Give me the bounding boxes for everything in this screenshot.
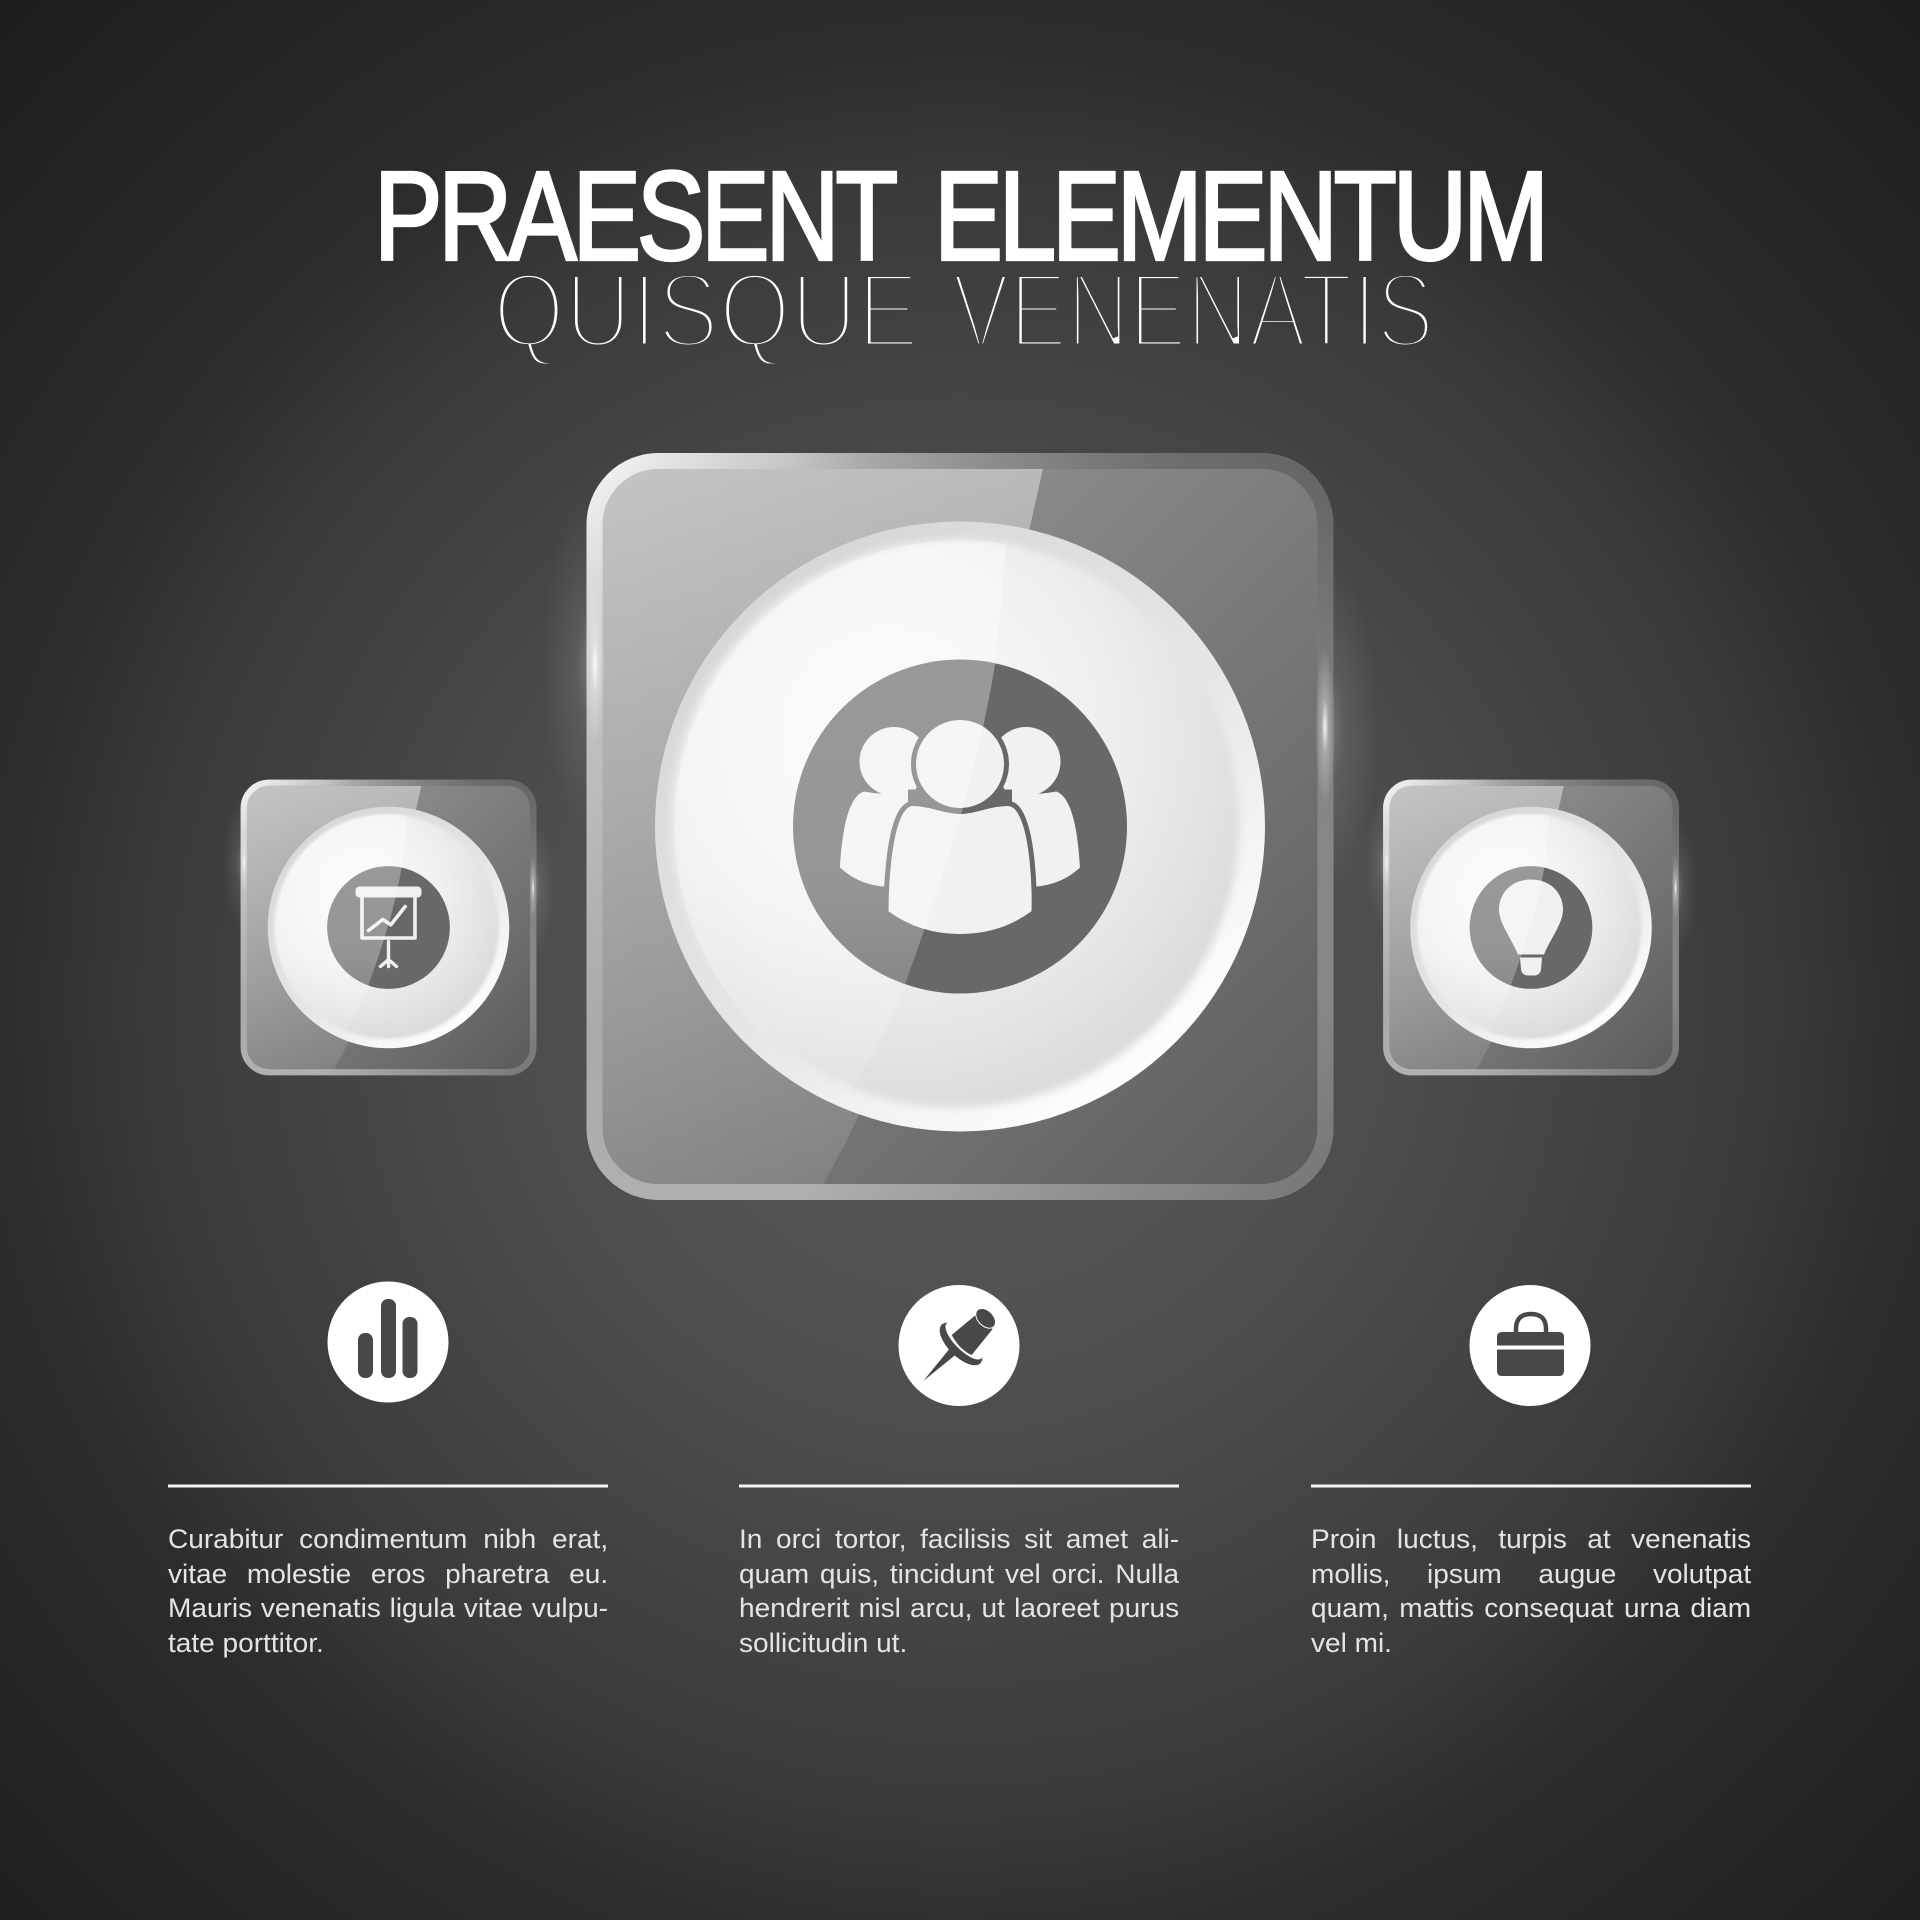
dark disc bbox=[1470, 866, 1592, 989]
icon: light bulb bbox=[1499, 880, 1563, 975]
text block: right column: mollis, ipsum augue volutpat bbox=[1311, 1558, 1751, 1588]
title bbox=[374, 146, 1545, 286]
icon: bar chart badge bbox=[328, 1282, 448, 1402]
icon: group of people bbox=[840, 718, 1080, 936]
icon: presentation board bbox=[356, 887, 421, 966]
text block: right column: quam, mattis consequat urna diam bbox=[1311, 1593, 1751, 1623]
text block: left column: tate porttitor. bbox=[168, 1628, 324, 1658]
dark disc bbox=[327, 866, 450, 989]
subtitle: QUISQUE bbox=[493, 250, 919, 370]
text block: left column: Curabitur condimentum nibh erat, bbox=[168, 1524, 608, 1554]
panel: right glass card bbox=[1365, 780, 1697, 1075]
subtitle bbox=[493, 250, 1434, 370]
subtitle: VENENATIS bbox=[952, 250, 1434, 370]
text block: right column: vel mi. bbox=[1311, 1628, 1392, 1658]
dark disc bbox=[793, 660, 1127, 994]
text block: left column bbox=[168, 1524, 608, 1658]
text block: centre column: sollicitudin ut. bbox=[739, 1628, 907, 1658]
title: PRAESENT bbox=[374, 146, 896, 286]
text block: right column bbox=[1311, 1524, 1751, 1658]
text block: centre column bbox=[739, 1524, 1179, 1658]
text block: left column: Mauris venenatis ligula vitae vulpu- bbox=[168, 1593, 608, 1623]
icon: push pin badge bbox=[898, 1285, 1020, 1406]
icon: briefcase badge bbox=[1470, 1285, 1590, 1406]
panel: left glass card bbox=[222, 780, 555, 1075]
text block: centre column: In orci tortor, facilisis sit amet ali- bbox=[739, 1524, 1179, 1554]
text block: right column: Proin luctus, turpis at venenatis bbox=[1311, 1524, 1751, 1554]
text block: centre column: quam quis, tincidunt vel orci. Nulla bbox=[739, 1558, 1179, 1588]
text block: left column: vitae molestie eros pharetra eu. bbox=[168, 1558, 608, 1588]
panel: centre glass card bbox=[540, 454, 1380, 1200]
title: ELEMENTUM bbox=[934, 146, 1545, 286]
text block: centre column: hendrerit nisl arcu, ut laoreet purus bbox=[739, 1593, 1179, 1623]
